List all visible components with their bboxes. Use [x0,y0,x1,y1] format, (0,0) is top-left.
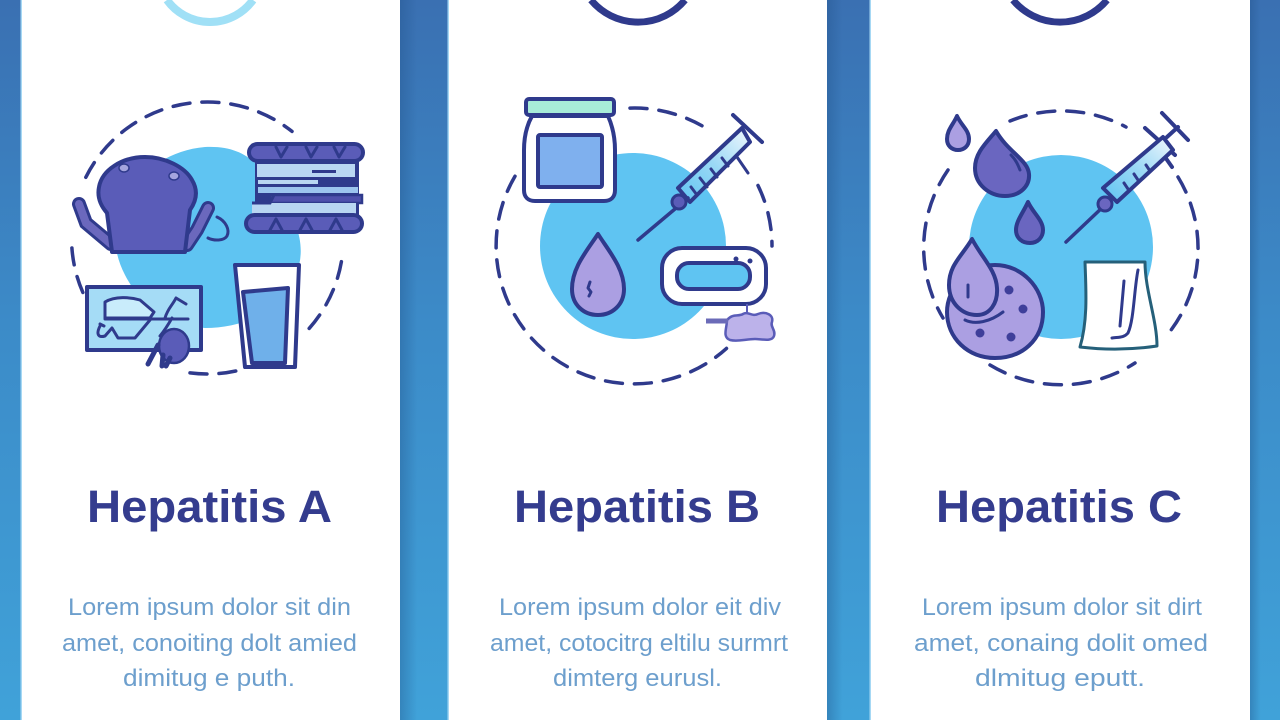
text block: C description: amet, conaing dolit omed [914,630,1208,657]
icon: large drop [975,131,1029,196]
text block: B description: Lorem ipsum dolor eit div [499,594,781,621]
top ring: light blue [167,0,253,22]
top ring: dark blue [591,0,685,22]
blue background circle [969,155,1153,339]
text block: B description: amet, cotocitrg eltilu surmrt [490,630,788,657]
text block: C description [914,594,1208,692]
text block: A description: dimitug e puth. [123,665,295,692]
panel: Hepatitis B [449,0,827,720]
text block: B description: dimterg eurusl. [553,665,722,692]
icon: glass of water [235,265,299,367]
dashed circle [72,102,341,374]
text block: C description: Lorem ipsum dolor sit dirt [922,594,1202,621]
panel: Hepatitis C [871,0,1250,720]
icon: razor / soap bar [662,248,766,304]
illustration: blood contact [924,111,1198,385]
icon: foam [706,304,774,341]
illustration: food and water transmission [72,102,363,374]
icon: contaminated cookie with drop [947,239,1043,358]
panel: Hepatitis A [22,0,400,720]
blue background blob [115,147,301,328]
text block: A description [62,594,357,692]
icon: sandwich [246,144,363,232]
text block: A description: Lorem ipsum dolor sit din [68,594,351,621]
icon: blood drop [572,234,624,315]
icon: small drop [947,116,969,150]
illustration: blood and shared items [496,99,774,384]
text block: B description [490,594,788,692]
icon: photo of dish and insect [87,287,201,366]
icon: jar [524,99,615,201]
dashed circle [924,111,1198,385]
text block: C description: dlmitug eputt. [975,665,1145,692]
heading: Hepatitis B: Hepatitis B [514,481,760,532]
icon: syringe [1066,113,1188,242]
top ring: dark blue [1013,0,1107,22]
heading: Hepatitis A: Hepatitis A [87,481,332,532]
icon: bread with arms [79,157,228,252]
heading: Hepatitis C: Hepatitis C [936,481,1182,532]
icon: plastic bag [1080,262,1157,349]
dashed circle [496,108,772,384]
text block: A description: amet, conoiting dolt amied [62,630,357,657]
icon: syringe [638,115,762,240]
icon: medium drop [1016,202,1043,243]
blue background circle [540,153,726,339]
